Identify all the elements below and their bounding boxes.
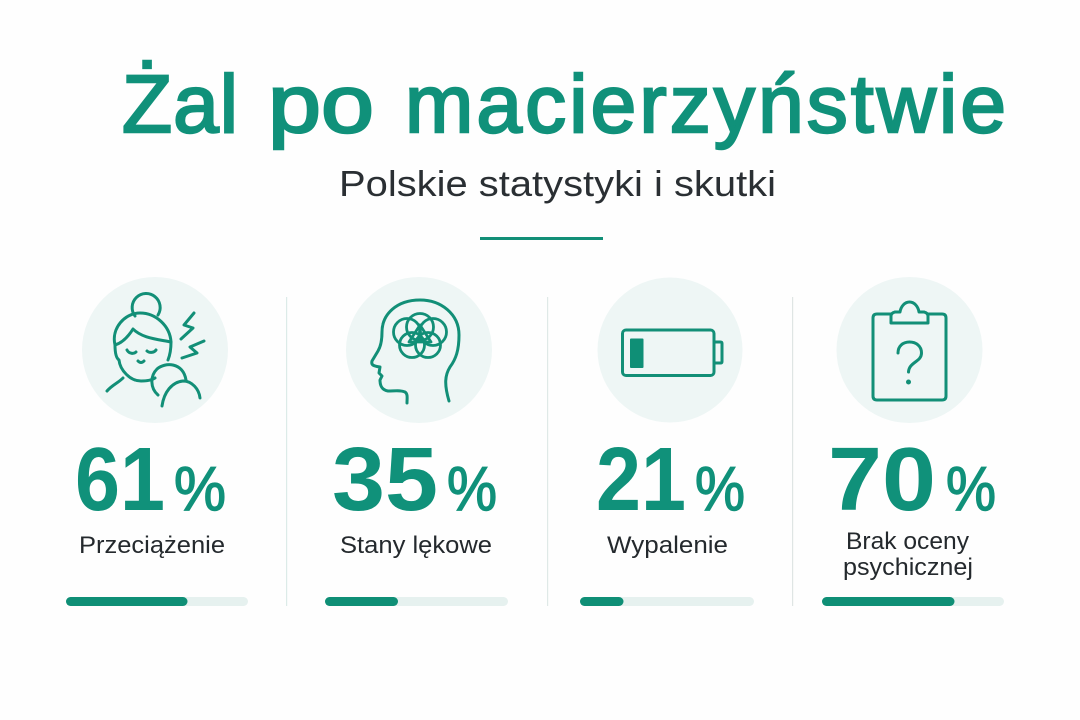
icon: clipboard with question mark (836, 277, 982, 423)
value 61%: 61 (75, 430, 165, 530)
icon: low battery (598, 278, 742, 422)
progress bar 21% (580, 597, 754, 606)
label: Przeciążenie (79, 532, 225, 559)
icon: tired mother with child (82, 277, 228, 423)
value 70%: 70 (828, 430, 936, 530)
value 21%: 21 (596, 430, 686, 530)
value 21%: % (695, 455, 745, 524)
subtitle: Polskie statystyki i skutki (339, 163, 776, 204)
label (843, 528, 973, 581)
value 70% (828, 430, 996, 530)
progress bar 61% (66, 597, 248, 606)
value 21% (596, 430, 745, 530)
value 61% (75, 430, 226, 530)
value 35% (332, 430, 497, 530)
panel: Brak oceny psychicznej (822, 277, 1004, 606)
heading underline (480, 237, 603, 240)
panel: Przeciążenie (66, 277, 248, 606)
value 35%: 35 (332, 430, 438, 530)
value 35%: % (447, 455, 497, 524)
progress bar 35% (325, 597, 508, 606)
label: Brak oceny (846, 528, 969, 555)
title: po (268, 59, 374, 150)
label: psychicznej (843, 554, 973, 581)
label: Stany lękowe (340, 532, 492, 559)
icon: head with tangled thoughts (346, 277, 492, 423)
panel: Stany lękowe (325, 277, 508, 606)
value 61%: % (174, 455, 226, 524)
value 70%: % (946, 455, 996, 524)
progress bar 70% (822, 597, 1004, 606)
title (122, 59, 1006, 150)
panel: Wypalenie (580, 278, 754, 606)
title: Żal (122, 59, 238, 150)
title: macierzyństwie (405, 59, 1006, 150)
label: Wypalenie (607, 532, 728, 559)
